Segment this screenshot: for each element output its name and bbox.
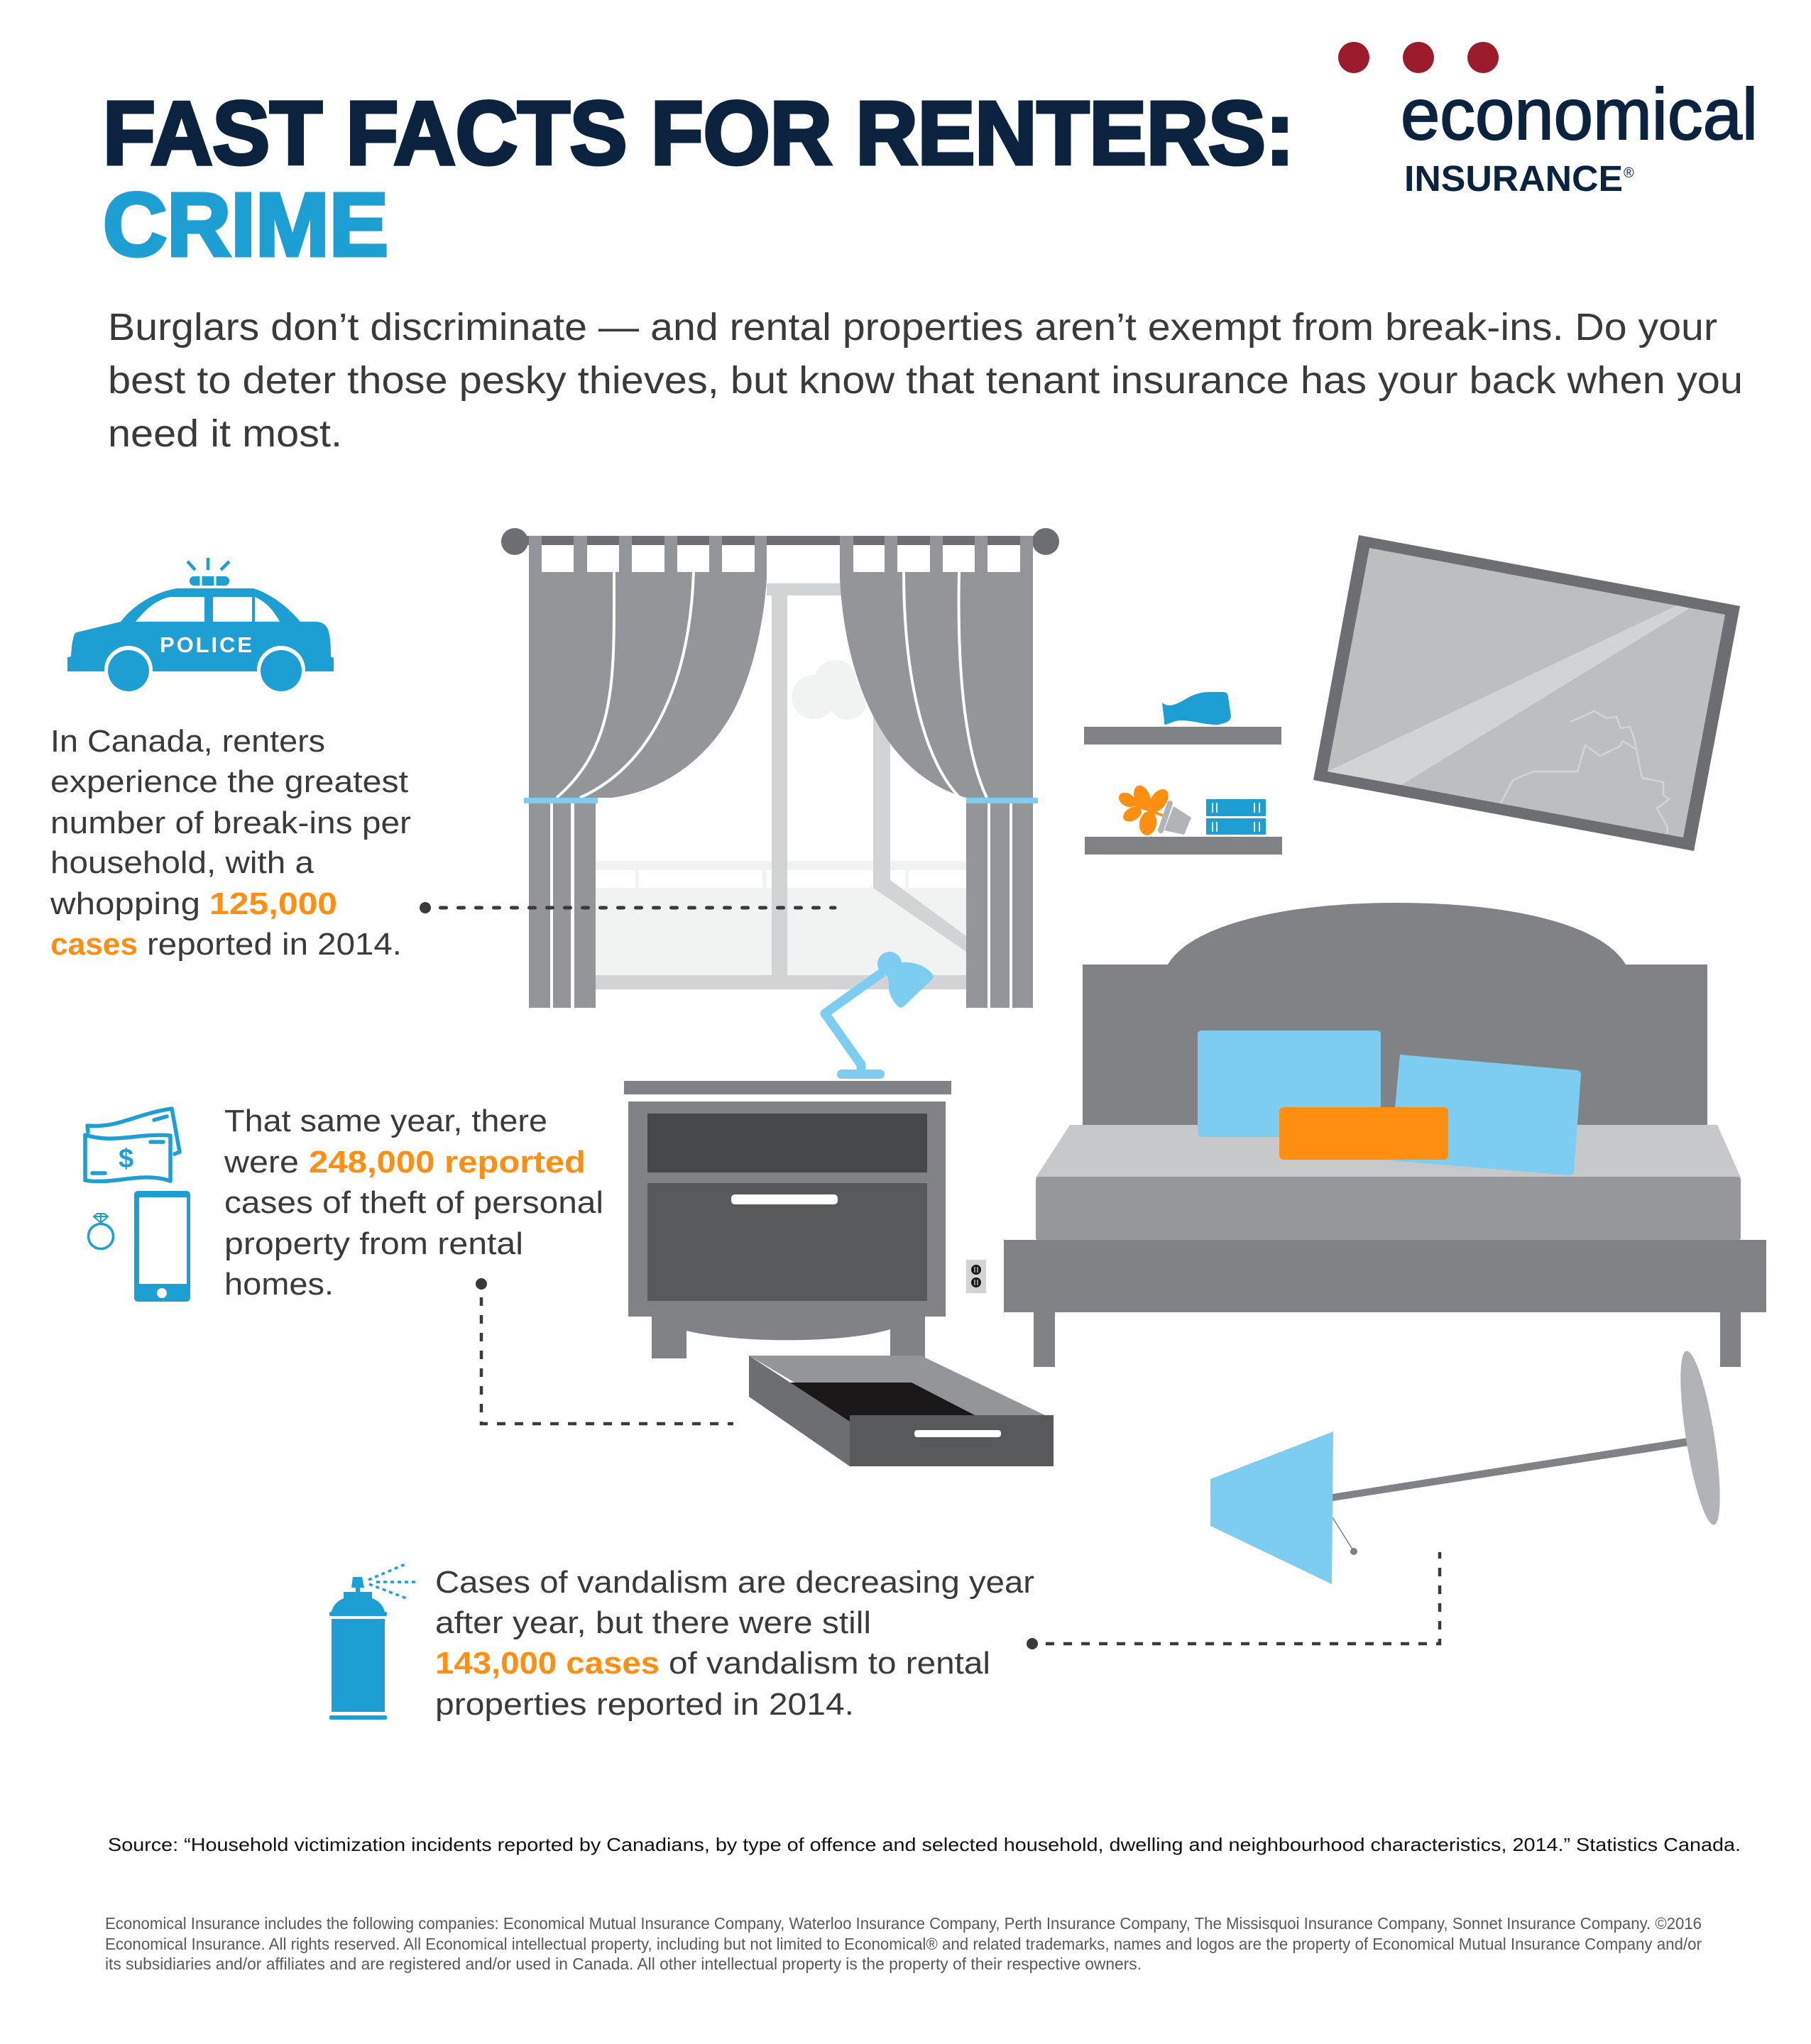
text: theft statistic: That same year, there [224, 1104, 547, 1138]
intro text: best to deter those pesky thieves, but know that tenant insurance has your back when you [108, 359, 1743, 402]
legal text: its subsidiaries and/or affiliates and are registered and/or used in Canada. All other intellectual property is the property of their respective owners. [105, 1955, 1142, 1973]
title: CRIME [103, 175, 388, 275]
desk lamp [825, 952, 934, 1079]
icon: spray can [329, 1564, 417, 1720]
title: FAST FACTS FOR RENTERS: [103, 83, 1294, 183]
dotted connector: vandalism to lamp [1027, 1552, 1440, 1649]
dotted connector: break-ins to window [420, 902, 835, 913]
text: vandalism statistic: of vandalism to rental [669, 1646, 990, 1681]
icon: police car: POLICE [160, 632, 252, 657]
nightstand [624, 1081, 951, 1358]
text: break-ins statistic: whopping [50, 886, 200, 921]
text: break-ins statistic: household, with a [50, 845, 314, 880]
legal text: Economical Insurance includes the following companies: Economical Mutual Insurance Company, Waterloo Insurance Company, Perth Insurance Company, The Missisquoi Insurance Company, Sonnet Insurance Company. ©2016 [105, 1914, 1702, 1933]
title [103, 83, 1294, 275]
text: break-ins statistic: reported in 2014. [147, 927, 402, 962]
legal text [105, 1914, 1702, 1973]
text: vandalism statistic: properties reported in 2014. [435, 1687, 854, 1722]
text: vandalism statistic [435, 1565, 1034, 1722]
text: theft statistic: cases of theft of personal [224, 1185, 603, 1220]
window view [596, 583, 966, 989]
text: vandalism statistic: Cases of vandalism are decreasing year [435, 1565, 1034, 1600]
icon: cash: $ [119, 1144, 133, 1174]
bed [1004, 903, 1766, 1367]
logo: Economical Insurance: economical [1401, 74, 1758, 155]
source line: Source: “Household victimization incidents reported by Canadians, by type of offence and selected household, dwelling and neighbourhood characteristics, 2014.” Statistics Canada. [108, 1834, 1741, 1855]
open drawer on the floor [749, 1356, 1054, 1466]
icon: smartphone [134, 1191, 190, 1302]
icon: diamond ring [88, 1214, 114, 1249]
power outlet [966, 1260, 986, 1293]
text: break-ins statistic: experience the greatest [50, 764, 408, 799]
text: theft statistic [224, 1104, 603, 1302]
text: break-ins statistic [50, 724, 411, 962]
icon: tipped plant pot [1116, 783, 1191, 837]
text: break-ins statistic: number of break-ins per [50, 806, 411, 840]
intro text: Burglars don’t discriminate — and rental properties aren’t exempt from break-ins. Do your [108, 306, 1717, 348]
logo: Economical Insurance [1338, 42, 1758, 199]
intro text: need it most. [108, 412, 342, 455]
text: theft statistic: property from rental [224, 1226, 523, 1261]
text: vandalism statistic: after year, but there were still [435, 1605, 871, 1640]
text: break-ins statistic: cases [50, 927, 138, 962]
fallen floor lamp [1210, 1348, 1728, 1584]
logo: Economical Insurance: ® [1624, 165, 1634, 181]
text: theft statistic: 248,000 reported [309, 1145, 586, 1180]
icon: tipped vase [1162, 692, 1231, 725]
right curtain [840, 536, 1038, 1008]
left curtain [524, 536, 767, 1008]
icon: police car [67, 558, 334, 694]
text: theft statistic: were [224, 1145, 299, 1180]
text: vandalism statistic: 143,000 cases [435, 1646, 660, 1681]
legal text: Economical Insurance. All rights reserved. All Economical intellectual property, including but not limited to Economical® and related trademarks, names and logos are the property of Economical Mutual Insurance Company and/or [105, 1935, 1702, 1953]
text: break-ins statistic: In Canada, renters [50, 724, 325, 759]
icon: books [1206, 799, 1266, 835]
icon: cash [85, 1109, 180, 1182]
curtain rod [501, 528, 1059, 555]
dotted connector: theft to drawer [476, 1278, 733, 1424]
text: break-ins statistic: 125,000 [209, 886, 337, 921]
intro text [108, 306, 1743, 455]
text: theft statistic: homes. [224, 1267, 334, 1302]
shelves [1084, 727, 1282, 855]
mirror with cracks [1313, 535, 1740, 851]
logo: Economical Insurance: INSURANCE [1404, 158, 1623, 199]
